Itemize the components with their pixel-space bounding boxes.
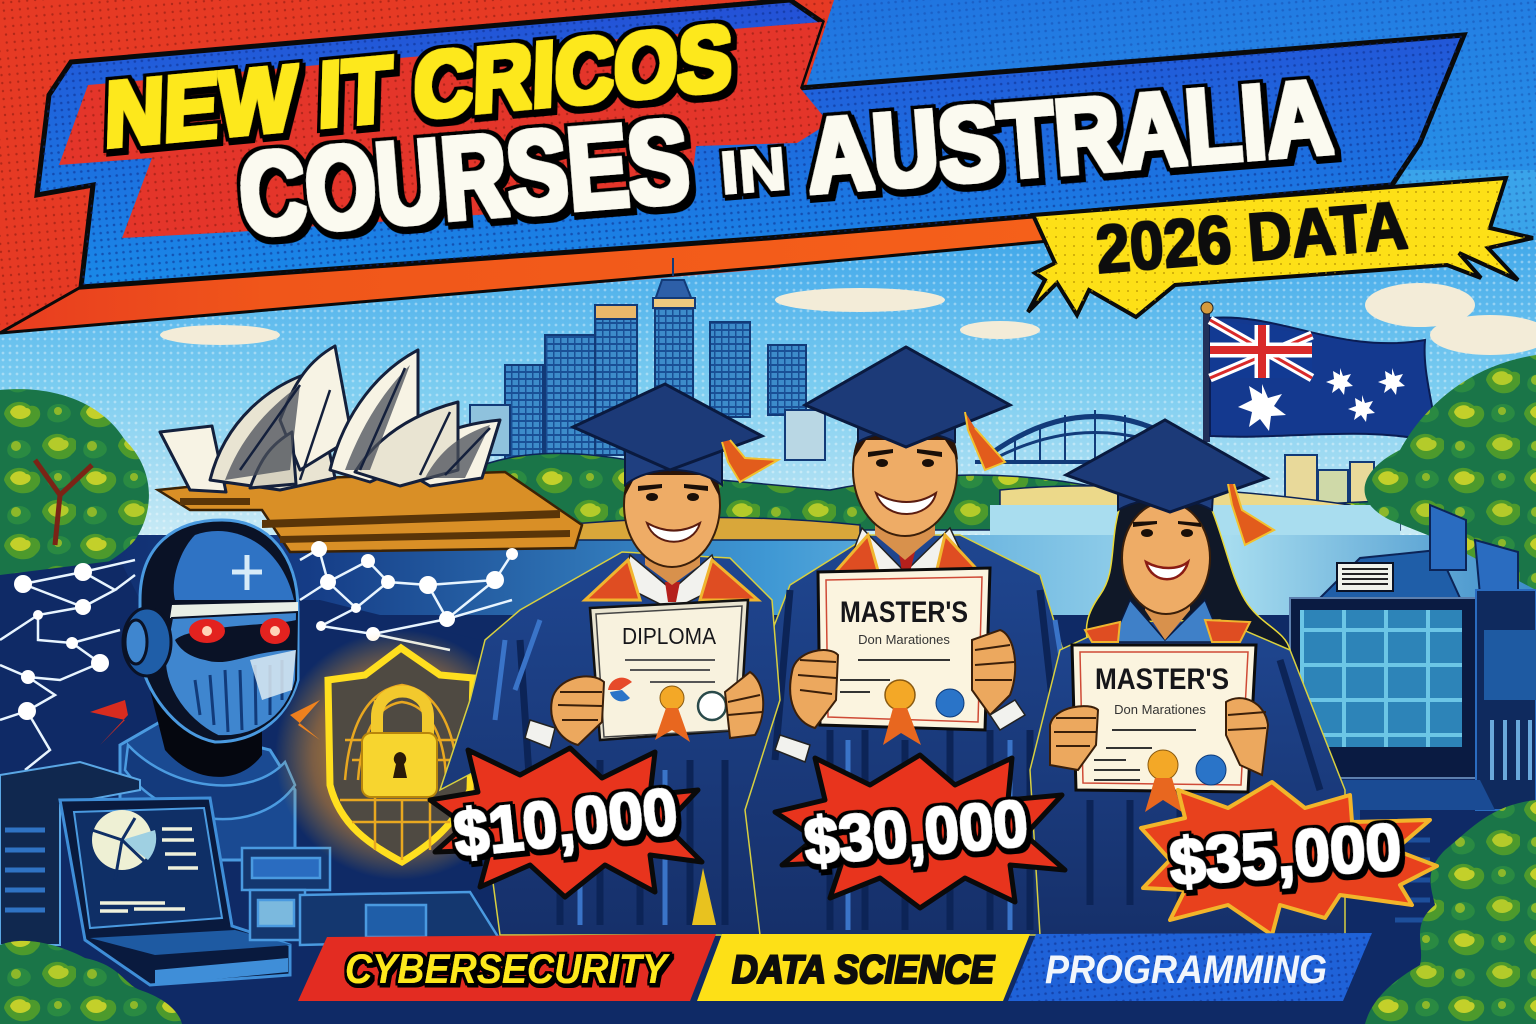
bottom category banner — [298, 933, 1372, 1001]
side cabinet — [1476, 590, 1536, 810]
laptop front edge — [155, 958, 288, 985]
robot red eyes — [189, 618, 290, 644]
mortarboard — [573, 384, 762, 470]
robe highlights — [745, 620, 1068, 930]
diploma: Don Marationes — [858, 632, 950, 647]
graduate 2: centre man — [722, 347, 1075, 935]
blue frame — [37, 0, 1464, 287]
diploma: MASTER'S — [840, 596, 968, 629]
price burst: $10,000: $10,000 — [450, 774, 681, 871]
data science tab: DATA SCIENCE — [732, 948, 995, 992]
programming tab — [1008, 933, 1372, 1001]
stole — [1085, 620, 1250, 642]
data science tab — [697, 934, 1030, 1001]
hands — [775, 630, 1025, 762]
server boxes — [242, 848, 500, 945]
diploma: Don Marationes — [1114, 702, 1206, 717]
network diagram — [0, 541, 518, 770]
price burst: $30,000 — [775, 755, 1065, 908]
hair — [624, 450, 720, 498]
red inner panel — [59, 22, 829, 238]
headline: IN: IN — [718, 135, 789, 207]
trees: upper right — [1365, 355, 1536, 590]
price burst: $35,000 — [1141, 782, 1437, 935]
robe — [1030, 620, 1345, 935]
stole — [585, 560, 758, 600]
cybersecurity tab — [298, 934, 716, 1001]
robot mask — [175, 620, 296, 662]
laptop body — [60, 798, 290, 985]
equipment towers — [1430, 505, 1518, 595]
desk base — [1300, 780, 1495, 830]
smile — [876, 493, 936, 514]
shirt — [622, 555, 722, 610]
icon: harbour bridge — [975, 410, 1215, 462]
frame dots — [37, 0, 1464, 287]
keyhole — [393, 752, 407, 778]
lower server stripes — [1395, 840, 1430, 920]
robot neck — [150, 690, 262, 777]
padlock shackle — [377, 692, 428, 738]
face — [853, 404, 957, 536]
callout: 2026 DATA — [1028, 178, 1533, 317]
helmet band — [170, 602, 298, 618]
smile — [647, 523, 700, 542]
vent panel — [1337, 563, 1393, 591]
robot figure — [120, 520, 298, 860]
red panel dots — [59, 22, 829, 238]
clouds — [160, 283, 1536, 355]
monitor grid — [1300, 610, 1462, 747]
eyes — [1133, 521, 1201, 537]
diploma — [590, 600, 748, 742]
orange underside strip — [0, 215, 1060, 333]
headline: AUSTRALIA: AUSTRALIA — [803, 58, 1336, 216]
side screen — [1484, 630, 1536, 700]
eyes — [868, 449, 942, 467]
robe — [440, 552, 780, 935]
title banner — [0, 0, 1464, 333]
padlock body — [362, 733, 437, 797]
long wavy hair — [1086, 500, 1290, 650]
skyline spire overlap — [672, 258, 674, 276]
robe highlights — [495, 620, 665, 925]
robot headset — [123, 608, 171, 676]
robot collar — [125, 745, 295, 819]
helmet emblem — [232, 555, 262, 590]
headline: NEW IT CRICOS: NEW IT CRICOS — [103, 5, 734, 167]
diploma — [818, 568, 990, 745]
monitor frame — [1290, 598, 1476, 778]
stole — [830, 535, 985, 578]
robot faceplate — [165, 612, 297, 736]
price burst: $30,000: $30,000 — [801, 785, 1031, 879]
headline: COURSES: COURSES — [235, 95, 694, 262]
mask vents — [195, 660, 282, 732]
laptop screen — [74, 808, 222, 928]
callout: 2026 DATA: 2026 DATA — [1093, 187, 1410, 288]
tie — [898, 548, 916, 572]
red side arrow marks — [90, 700, 128, 745]
equipment dome — [1320, 550, 1460, 598]
cap band — [1118, 460, 1215, 510]
neck — [875, 500, 935, 560]
lower navy tech backdrop — [0, 560, 480, 1024]
price burst: $35,000: $35,000 — [1167, 809, 1404, 899]
diploma: DIPLOMA — [622, 623, 717, 649]
icon: flag of Australia — [1201, 302, 1436, 442]
tassel — [722, 440, 778, 482]
helmet shine — [174, 531, 294, 600]
collar — [1112, 600, 1222, 642]
hair — [853, 412, 958, 460]
cybersecurity tab: CYBERSECURITY — [345, 945, 671, 992]
laptop keyboard — [90, 930, 292, 955]
programming tab: PROGRAMMING — [1045, 948, 1327, 992]
robe folds — [1090, 660, 1320, 905]
graduate 1: left man — [440, 384, 780, 935]
server tower left — [0, 762, 140, 945]
mortarboard — [805, 347, 1010, 447]
trees: lower left — [0, 941, 182, 1024]
robe folds — [775, 590, 1060, 930]
server rack right — [1290, 505, 1536, 920]
face — [624, 443, 720, 567]
orange side marks — [290, 700, 320, 740]
cap band — [858, 395, 955, 442]
laptop text lines — [100, 829, 198, 911]
robe folds — [520, 640, 725, 925]
trees: upper left — [0, 389, 149, 590]
mortarboard — [1066, 420, 1267, 512]
tassel — [1228, 484, 1274, 545]
neck — [1145, 590, 1190, 640]
shield with padlock — [275, 630, 525, 880]
smile plate — [250, 650, 296, 700]
city skyline — [470, 262, 1374, 510]
tie — [665, 582, 680, 602]
smile — [1146, 562, 1188, 579]
shield — [328, 648, 473, 862]
icon: Sydney Opera House — [158, 346, 582, 552]
hands — [525, 672, 763, 748]
tassel — [965, 412, 1005, 470]
cap band — [625, 435, 722, 485]
face — [1122, 502, 1210, 614]
small coloured marker — [692, 868, 716, 925]
graduate 3: right woman — [1030, 420, 1345, 935]
robe — [722, 535, 1075, 935]
laptop with pie chart — [60, 798, 292, 985]
side bars — [1492, 720, 1530, 780]
harbour shore with trees — [470, 453, 1400, 540]
robot torso — [120, 722, 295, 860]
diploma — [1072, 645, 1256, 812]
neck — [645, 535, 700, 585]
water — [0, 535, 1536, 615]
pie chart — [92, 810, 156, 880]
shirt — [850, 528, 965, 600]
shield circuitry — [340, 685, 465, 860]
trees: lower right — [1365, 800, 1536, 1024]
top header background — [0, 0, 1536, 333]
eyes — [638, 484, 708, 501]
robot helmet — [140, 520, 298, 742]
price burst: $10,000 — [430, 748, 702, 897]
shield glow — [275, 630, 525, 880]
hands — [1050, 698, 1268, 775]
diploma: MASTER'S — [1095, 663, 1229, 696]
